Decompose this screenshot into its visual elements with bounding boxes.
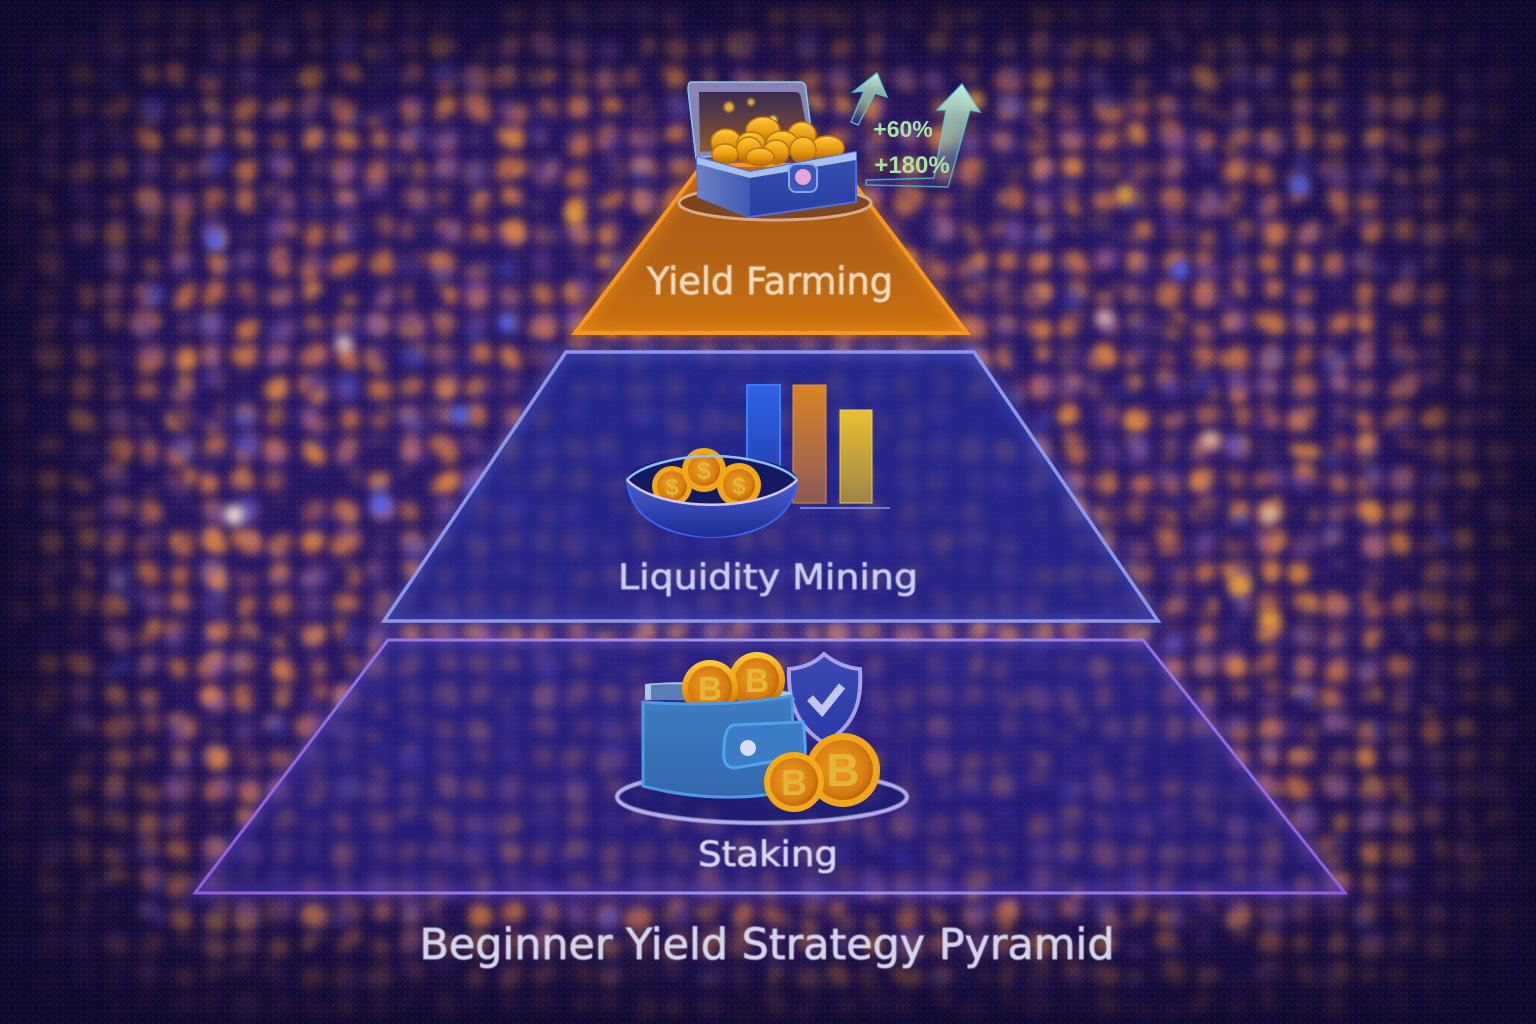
icon: shield with check [789, 654, 860, 743]
icon: coin front left [682, 660, 738, 716]
icon: top coin: $ [697, 457, 711, 485]
icon: left coin: $ [665, 474, 679, 501]
icon: top coin [682, 448, 726, 492]
icon: platform ring [679, 186, 871, 220]
label: Liquidity Mining: Liquidity Mining [618, 558, 918, 598]
panel: bottom tier Staking [195, 640, 1345, 893]
panel: top tier Yield Farming [575, 73, 980, 333]
label: Staking: Staking [698, 835, 838, 875]
icon: bowl of coins [627, 448, 797, 537]
icon: wallet with coins [643, 652, 805, 797]
label: Yield Farming: Yield Farming [646, 260, 893, 303]
icon: large coin: B [826, 744, 860, 796]
icon: left coin [652, 466, 692, 506]
icon: small coin [764, 752, 824, 812]
title: Beginner Yield Strategy Pyramid [420, 920, 1114, 970]
panel: middle tier Liquidity Mining [384, 352, 1158, 621]
icon: right coin: $ [732, 473, 746, 500]
bar chart [747, 385, 890, 509]
icon: treasure chest [688, 82, 856, 217]
icon: right coin [717, 463, 761, 507]
icon: coin front left: B [698, 670, 722, 707]
icon: small coin: B [781, 762, 807, 803]
icon: growth arrows [851, 73, 980, 187]
icon: platform ring [617, 771, 907, 823]
label: +60%: +60% [873, 116, 933, 142]
icon: coin back left [729, 652, 785, 708]
icon: gold coins [711, 117, 844, 166]
label: +180%: +180% [874, 152, 950, 179]
icon: coin back left: B [745, 662, 769, 699]
icon: large coin [806, 733, 880, 807]
